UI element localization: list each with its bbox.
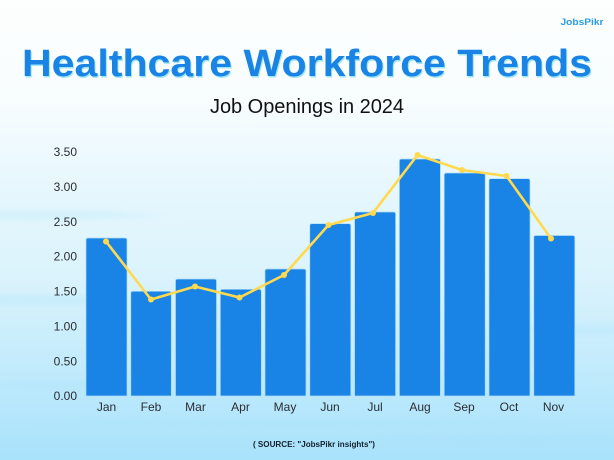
x axis labels: Sep <box>453 400 475 414</box>
x axis labels: Mar <box>185 400 206 414</box>
y axis labels: 0.00 <box>54 389 77 403</box>
chart: job openings by month <box>54 145 575 414</box>
trend line <box>103 152 554 302</box>
x axis labels: May <box>274 400 296 414</box>
x axis labels: Jan <box>97 400 116 414</box>
y axis labels: 2.00 <box>54 250 77 264</box>
y axis labels: 2.50 <box>54 215 77 229</box>
y axis labels: 3.00 <box>54 180 77 194</box>
y axis labels <box>54 145 77 403</box>
x axis labels: Nov <box>543 400 564 414</box>
x axis labels: Feb <box>141 400 162 414</box>
y axis labels: 0.50 <box>54 354 77 368</box>
x axis labels <box>97 400 564 414</box>
y axis labels: 1.50 <box>54 284 77 298</box>
source note: ( SOURCE: "JobsPikr insights") <box>253 440 375 449</box>
x axis labels: Aug <box>409 400 431 414</box>
bars <box>86 159 575 396</box>
x axis labels: Jul <box>367 400 383 414</box>
y axis labels: 1.00 <box>54 320 77 334</box>
logo: JobsPikr: JobsPikr <box>560 17 604 28</box>
x axis labels: Apr <box>231 400 250 414</box>
x axis labels: Oct <box>500 400 519 414</box>
title: Healthcare Workforce Trends <box>22 43 592 85</box>
x axis labels: Jun <box>320 400 340 414</box>
y axis labels: 3.50 <box>54 145 77 159</box>
subtitle: Job Openings in 2024 <box>210 96 404 118</box>
title: Healthcare Workforce Trends <box>23 44 593 86</box>
